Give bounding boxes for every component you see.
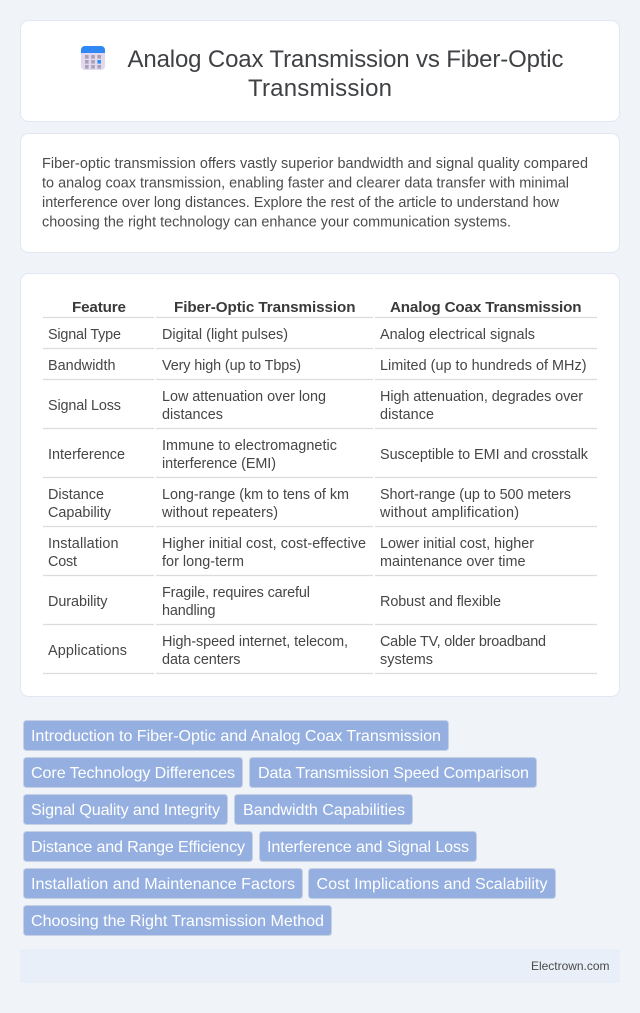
row: signal type bbox=[43, 327, 597, 348]
tag: data speed: Data Transmission Speed Comparison bbox=[258, 764, 529, 782]
row: applications bbox=[43, 634, 597, 674]
row: applications: Applications bbox=[48, 643, 127, 659]
footer: Electrown.com bbox=[531, 959, 610, 973]
row: applications: data centers bbox=[162, 652, 240, 668]
row: distance capability: without repeaters) bbox=[161, 505, 278, 521]
row: applications: High-speed internet, telecom, bbox=[162, 634, 348, 650]
footer bbox=[20, 949, 620, 983]
row: signal loss: distance bbox=[380, 407, 434, 423]
row: installation cost: maintenance over time bbox=[380, 554, 526, 570]
row: durability: Robust and flexible bbox=[380, 594, 501, 610]
table header row: Fiber-Optic Transmission bbox=[174, 299, 356, 316]
table header row bbox=[43, 299, 597, 318]
title: Analog Coax Transmission vs Fiber-Optic bbox=[128, 46, 564, 73]
tag: introduction bbox=[24, 720, 448, 750]
row: durability bbox=[43, 585, 597, 624]
tag: core technology: Core Technology Differences bbox=[31, 764, 235, 782]
row: interference: Susceptible to EMI and crosstalk bbox=[380, 447, 589, 463]
icon: calendar grid bbox=[81, 46, 105, 70]
tag: bandwidth bbox=[234, 794, 412, 824]
row: installation cost: Lower initial cost, higher bbox=[380, 536, 534, 552]
tag: introduction: Introduction to Fiber-Optic and Analog Coax Transmission bbox=[31, 727, 441, 745]
row: distance capability: Distance bbox=[48, 487, 104, 503]
row: installation cost bbox=[43, 536, 597, 576]
title bbox=[128, 46, 564, 102]
row: applications: Cable TV, older broadband bbox=[380, 634, 546, 650]
title: Transmission bbox=[248, 75, 392, 102]
tag: distance bbox=[24, 832, 252, 862]
table header row: Feature bbox=[72, 299, 126, 316]
tag: choosing: Choosing the Right Transmission Method bbox=[31, 912, 324, 930]
row: distance capability bbox=[43, 487, 597, 526]
tag: cost bbox=[308, 868, 556, 898]
tag: interference bbox=[260, 832, 476, 862]
row: signal type: Analog electrical signals bbox=[380, 327, 535, 343]
intro text bbox=[42, 156, 588, 230]
tag: choosing bbox=[24, 906, 332, 936]
row: installation cost: Installation bbox=[48, 536, 118, 552]
row: durability: handling bbox=[162, 603, 216, 619]
table header row: Analog Coax Transmission bbox=[390, 299, 582, 316]
intro text: to analog coax transmission, enabling faster and clearer data transfer with minimal bbox=[42, 176, 569, 192]
row: interference: Immune to electromagnetic bbox=[162, 438, 337, 454]
row: installation cost: Higher initial cost, cost-effective bbox=[162, 536, 366, 552]
row: installation cost: Cost bbox=[48, 554, 77, 570]
row: bandwidth: Bandwidth bbox=[48, 358, 116, 374]
tag: cost: Cost Implications and Scalability bbox=[316, 875, 548, 893]
row: distance capability: Short-range (up to 500 meters bbox=[380, 487, 571, 503]
row: durability: Fragile, requires careful bbox=[162, 585, 310, 601]
row: installation cost: for long-term bbox=[162, 554, 244, 570]
tag: installation: Installation and Maintenance Factors bbox=[31, 875, 295, 893]
row: signal loss: Signal Loss bbox=[48, 398, 121, 414]
row: distance capability: without amplification) bbox=[379, 505, 519, 521]
row: applications: systems bbox=[380, 652, 433, 668]
panel: header bbox=[20, 20, 620, 122]
row: distance capability: Long-range (km to tens of km bbox=[162, 487, 349, 503]
tag: interference: Interference and Signal Loss bbox=[267, 838, 469, 856]
row: signal type: Signal Type bbox=[48, 327, 121, 343]
topic tags bbox=[24, 720, 556, 936]
row: bandwidth: Limited (up to hundreds of MHz) bbox=[380, 358, 586, 374]
tag: bandwidth: Bandwidth Capabilities bbox=[243, 801, 405, 819]
row: distance capability: Capability bbox=[48, 505, 112, 521]
tag: signal quality: Signal Quality and Integrity bbox=[31, 801, 221, 819]
row: signal loss: Low attenuation over long bbox=[162, 389, 326, 405]
tag: data speed bbox=[250, 758, 536, 788]
panel: introduction bbox=[20, 134, 620, 252]
row: interference: interference (EMI) bbox=[162, 456, 276, 472]
tag: core technology bbox=[24, 758, 242, 788]
intro text: interference over long distances. Explore the rest of the article to understand how bbox=[42, 195, 560, 211]
row: bandwidth bbox=[43, 358, 597, 380]
row: signal loss: distances bbox=[162, 407, 223, 423]
row: signal loss: High attenuation, degrades over bbox=[380, 389, 583, 405]
row: signal loss bbox=[43, 389, 597, 428]
panel: comparison table bbox=[20, 274, 620, 696]
row: interference: Interference bbox=[48, 447, 125, 463]
row: bandwidth: Very high (up to Tbps) bbox=[162, 358, 301, 374]
tag: signal quality bbox=[24, 794, 228, 824]
tag: distance: Distance and Range Efficiency bbox=[31, 838, 246, 856]
tag: installation bbox=[24, 868, 302, 898]
row: durability: Durability bbox=[48, 594, 108, 610]
intro text: choosing the right technology can enhance your communication systems. bbox=[42, 214, 511, 230]
row: interference bbox=[43, 438, 597, 478]
intro text: Fiber-optic transmission offers vastly superior bandwidth and signal quality compared bbox=[42, 156, 588, 172]
row: signal type: Digital (light pulses) bbox=[162, 327, 288, 343]
